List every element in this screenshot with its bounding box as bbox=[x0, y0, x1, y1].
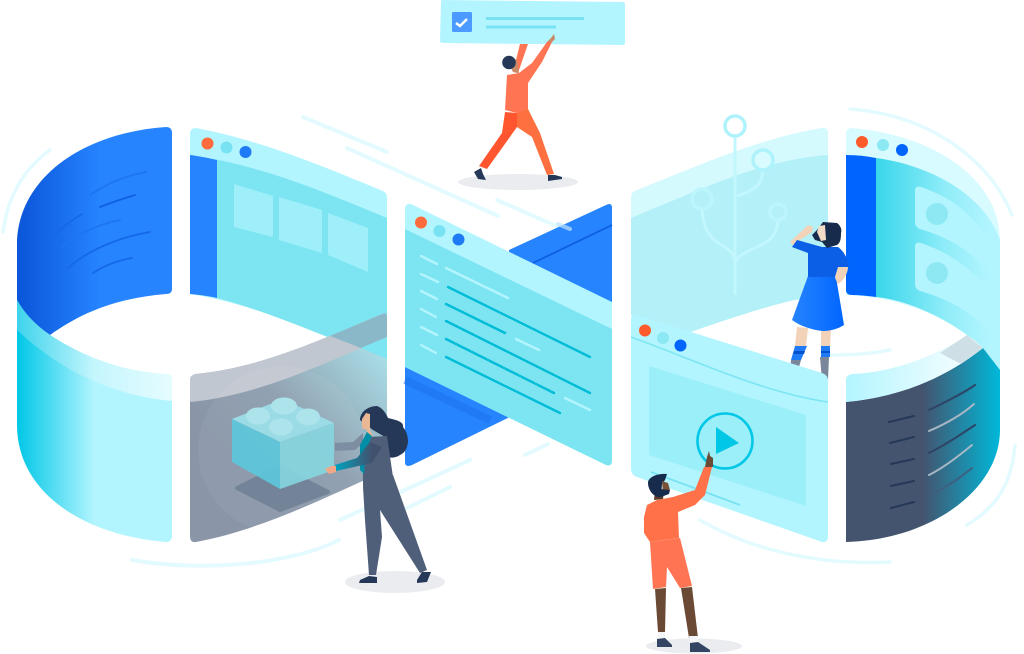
panel: top-right translucent git screen bbox=[631, 116, 828, 375]
shirt and arm bbox=[644, 467, 712, 542]
skirt bbox=[792, 276, 844, 331]
content tiles bbox=[234, 184, 368, 272]
shoes bbox=[474, 168, 486, 180]
legs bbox=[655, 587, 710, 652]
head bbox=[502, 56, 519, 73]
trousers bbox=[479, 109, 534, 169]
shorts bbox=[650, 538, 692, 589]
panel: gray building block screen bbox=[190, 313, 387, 542]
code lines on blue screen bbox=[55, 172, 150, 273]
card: checklist held overhead bbox=[440, 0, 625, 45]
panel: left lower cyan curved screen bbox=[17, 300, 172, 542]
icon: lego block bbox=[198, 366, 366, 534]
motion lines bbox=[3, 109, 1015, 566]
hand bbox=[547, 34, 555, 42]
shoes bbox=[359, 572, 431, 583]
skin arms bbox=[790, 225, 848, 284]
window dots bbox=[639, 324, 686, 352]
figure: woman in blue dress bbox=[790, 222, 849, 380]
panel: top-left browser window bbox=[190, 128, 387, 360]
legs bbox=[363, 475, 427, 575]
line numbers bbox=[421, 256, 590, 410]
window dots bbox=[202, 138, 252, 158]
head bbox=[648, 474, 670, 500]
torso bbox=[363, 436, 393, 487]
icon: checkbox bbox=[452, 12, 472, 32]
icon: play button bbox=[698, 414, 752, 468]
hair bbox=[360, 406, 408, 458]
head and hair bbox=[812, 222, 841, 248]
panel: center blue back shape bbox=[405, 204, 612, 466]
window dots bbox=[415, 216, 464, 246]
panel: far-right browser screen bbox=[846, 128, 1000, 370]
legs and socks bbox=[790, 327, 831, 380]
window dots bbox=[856, 136, 908, 156]
panel: left blue curved screen bbox=[17, 127, 172, 335]
figure: woman holding lego block bbox=[325, 406, 445, 593]
code lines bbox=[889, 385, 975, 508]
branching tree icon bbox=[692, 116, 786, 295]
code lines bbox=[446, 287, 590, 413]
figure: man lifting checklist bbox=[458, 34, 578, 190]
raised far arm bbox=[513, 44, 528, 73]
panel: center code browser bbox=[405, 204, 612, 465]
blue top bbox=[792, 240, 849, 277]
far arm bbox=[335, 433, 363, 451]
panel: far-right dark code screen bbox=[846, 335, 1000, 542]
torso and arm bbox=[505, 42, 552, 113]
near arm bbox=[335, 442, 382, 471]
hand bbox=[705, 451, 713, 467]
figure: man reaching toward play button bbox=[644, 451, 742, 654]
face bbox=[362, 413, 373, 438]
content cards bbox=[915, 186, 990, 333]
panel: lower-right video browser bbox=[631, 315, 828, 542]
